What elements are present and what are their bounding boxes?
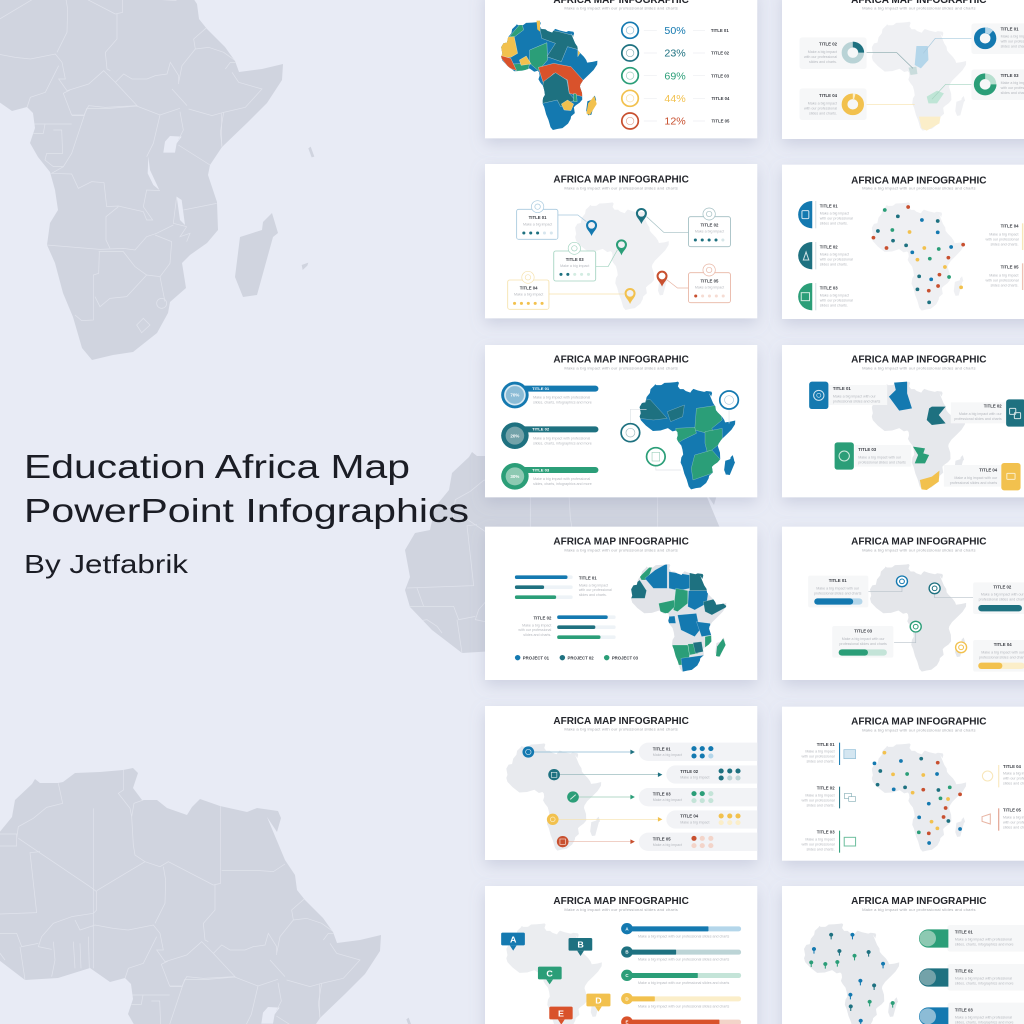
row 69% bbox=[622, 68, 730, 84]
main title: PowerPoint Infographics bbox=[24, 492, 469, 529]
callout C bbox=[538, 967, 562, 984]
connector lines bbox=[549, 215, 688, 294]
row 04 bbox=[547, 810, 757, 829]
map pins bbox=[586, 208, 668, 304]
progress row C: C bbox=[625, 973, 629, 978]
slide title: AFRICA MAP INFOGRAPHIC bbox=[851, 896, 987, 907]
row: title 02 20%: slides, charts, infographics and more bbox=[533, 441, 592, 445]
rating box 01: Make a big impact bbox=[523, 222, 552, 226]
main title bbox=[24, 448, 469, 529]
slide title: AFRICA MAP INFOGRAPHIC bbox=[553, 355, 689, 366]
block: title 05 bbox=[982, 808, 1024, 831]
panel: title 03 progress: Make a big impact with our bbox=[842, 637, 885, 641]
callout E bbox=[549, 1007, 573, 1024]
icon: teal ring bbox=[621, 409, 647, 442]
row: title 02 20% bbox=[501, 422, 598, 449]
block: title 03: TITLE 03 bbox=[817, 830, 835, 835]
row: title 03 30%: TITLE 03 bbox=[532, 467, 550, 472]
block: title 02: slides and charts. bbox=[807, 803, 835, 807]
progress row E bbox=[621, 1016, 741, 1024]
map dots bbox=[873, 751, 962, 845]
bars: title 01: Make a big impact bbox=[579, 583, 608, 587]
block: title 03: Make a big impact bbox=[805, 837, 835, 841]
row 12%: TITLE 05 bbox=[712, 119, 730, 124]
bars: title 01: with our professional bbox=[579, 588, 612, 592]
card: title 03: professional slides and charts bbox=[858, 460, 906, 464]
background map: northern Africa, bottom left bbox=[0, 768, 412, 1024]
bars: title 02: TITLE 02 bbox=[533, 615, 552, 620]
background map: West Africa behind the slides bbox=[405, 452, 719, 653]
connector lines bbox=[868, 587, 973, 643]
slide: pins with rating boxes bbox=[485, 164, 757, 318]
callout D bbox=[586, 994, 610, 1012]
title 02 with half-circle icon: slides and charts. bbox=[820, 262, 848, 266]
row 05 bbox=[557, 833, 757, 851]
panel: title 02 donut: with our professional bbox=[804, 55, 837, 59]
row 02 bbox=[548, 765, 757, 784]
panel: title 03 progress: TITLE 03 bbox=[854, 629, 873, 634]
panel: title 04 donut: with our professional bbox=[804, 106, 837, 110]
panel: title 04 progress bbox=[973, 640, 1024, 672]
slide: small pins and cards bbox=[782, 886, 1024, 1024]
row 69%: TITLE 03 bbox=[711, 73, 730, 78]
title 02 with half-circle icon: with our professional bbox=[820, 257, 853, 261]
slide subtitle: Make a big impact with our professional slides and charts bbox=[862, 186, 976, 191]
callout E: E bbox=[558, 1008, 564, 1018]
byline: By Jetfabrik bbox=[24, 549, 189, 579]
bars: title 02: with our professional bbox=[518, 628, 552, 632]
row: title 03 30%: 30% bbox=[510, 474, 519, 479]
title 03 with half-circle icon: Make a big impact bbox=[820, 293, 849, 297]
row 03 bbox=[567, 788, 757, 806]
progress row D: Make a big impact with our professional slides and charts bbox=[638, 1004, 730, 1008]
row: title 03 30% bbox=[501, 463, 598, 490]
card: title 03: TITLE 03 bbox=[858, 447, 877, 452]
row 50%: TITLE 01 bbox=[711, 28, 729, 33]
block: title 03 bbox=[802, 830, 856, 853]
card: title 01: TITLE 01 bbox=[833, 386, 851, 391]
rating box 05: Make a big impact bbox=[695, 286, 724, 290]
title 01 with half-circle icon: TITLE 01 bbox=[820, 203, 838, 208]
panel: title 04 donut bbox=[800, 88, 867, 120]
panel: title 02 donut: TITLE 02 bbox=[819, 42, 838, 47]
slide subtitle: Make a big impact with our professional slides and charts bbox=[564, 907, 678, 912]
percentage rows bbox=[622, 22, 730, 129]
card row 03: TITLE 03 bbox=[955, 1007, 973, 1012]
callout C: C bbox=[546, 968, 554, 978]
main title: Education Africa Map bbox=[24, 448, 410, 485]
progress row A: A bbox=[625, 926, 629, 931]
panel: title 04 progress: TITLE 04 bbox=[994, 642, 1012, 647]
callout A bbox=[501, 933, 525, 951]
row: title 03 30%: slides, charts, infographics and more bbox=[533, 482, 592, 486]
card: title 02: professional slides and charts bbox=[954, 417, 1002, 421]
slide subtitle: Make a big impact with our professional slides and charts bbox=[862, 6, 976, 11]
background map: southern Africa, top left bbox=[0, 0, 314, 360]
slide title: AFRICA MAP INFOGRAPHIC bbox=[851, 717, 987, 728]
slide: highlighted countries with icon cards bbox=[782, 345, 1024, 497]
rating box 04: TITLE 04 bbox=[520, 286, 538, 291]
title 05 right block bbox=[985, 263, 1023, 290]
rating box 05: TITLE 05 bbox=[701, 279, 719, 284]
row: title 01 70%: TITLE 01 bbox=[532, 386, 550, 391]
row 03: Make a big impact bbox=[653, 798, 682, 802]
panel: title 04 donut: TITLE 04 bbox=[819, 93, 838, 98]
card: title 02 bbox=[927, 399, 1024, 427]
rating box 03: TITLE 03 bbox=[566, 257, 584, 262]
legend: PROJECT 01 bbox=[523, 655, 550, 660]
slide: progress panels bbox=[782, 527, 1024, 680]
bars: title 01: slides and charts. bbox=[579, 593, 607, 597]
progress row B: B bbox=[625, 950, 629, 955]
row: title 02 20%: Make a big impact with professional bbox=[533, 436, 590, 440]
panel: title 02 progress bbox=[973, 582, 1024, 614]
panel: title 03 donut bbox=[971, 69, 1024, 100]
title 01 with half-circle icon: slides and charts. bbox=[820, 222, 848, 226]
connector lines bbox=[867, 53, 913, 68]
slide: project bars and map bbox=[485, 527, 757, 680]
slide: percent circles and blue green map bbox=[485, 345, 757, 497]
row 04: Make a big impact bbox=[680, 820, 709, 824]
card: title 01: Make a big impact with our bbox=[833, 394, 877, 398]
progress row D bbox=[621, 993, 741, 1008]
slide subtitle: Make a big impact with our professional slides and charts bbox=[564, 366, 678, 371]
grey map bbox=[575, 202, 669, 310]
legend bbox=[515, 655, 639, 660]
row: title 02 20%: 20% bbox=[510, 433, 519, 438]
title 05 right block: with our professional bbox=[985, 278, 1019, 282]
row 12% bbox=[622, 113, 730, 129]
title 05 right block: TITLE 05 bbox=[1001, 265, 1019, 270]
slide: dots with side icons bbox=[782, 707, 1024, 861]
title 03 with half-circle icon: TITLE 03 bbox=[820, 285, 838, 290]
panel: title 04 progress: Make a big impact with our bbox=[981, 651, 1024, 655]
card: title 02: TITLE 02 bbox=[984, 403, 1002, 408]
panel: title 03 progress bbox=[832, 626, 893, 658]
row 44% bbox=[622, 90, 730, 106]
map markers bbox=[896, 576, 967, 653]
block: title 02: with our professional bbox=[802, 798, 835, 802]
rating box 01: TITLE 01 bbox=[529, 215, 547, 220]
slide title: AFRICA MAP INFOGRAPHIC bbox=[851, 175, 987, 186]
rating box 02 bbox=[688, 208, 730, 247]
row: title 01 70%: slides, charts, infographics and more bbox=[533, 401, 592, 405]
card: title 03 bbox=[835, 442, 929, 470]
slides, rows 1 and 2 bbox=[485, 0, 1024, 319]
callout A: A bbox=[510, 934, 517, 944]
slide subtitle: Make a big impact with our professional slides and charts bbox=[862, 727, 976, 732]
panel: title 01 progress: TITLE 01 bbox=[829, 578, 847, 583]
row: title 01 70%: 70% bbox=[510, 393, 519, 398]
block: title 04: TITLE 04 bbox=[1003, 764, 1022, 769]
row 05: TITLE 05 bbox=[653, 836, 671, 841]
slide subtitle: Make a big impact with our professional slides and charts bbox=[862, 548, 976, 553]
panel: title 01 progress bbox=[808, 576, 868, 607]
progress row B bbox=[621, 946, 741, 962]
title 05 right block: slides and charts. bbox=[990, 283, 1019, 287]
panel: title 03 progress: professional slides and charts bbox=[839, 642, 887, 646]
panel: title 02 progress: TITLE 02 bbox=[993, 584, 1012, 589]
block: title 01: with our professional bbox=[802, 755, 835, 759]
block: title 05: TITLE 05 bbox=[1003, 808, 1022, 813]
block: title 01 bbox=[802, 742, 856, 765]
row 50% bbox=[622, 22, 729, 38]
slide: lettered callouts and progress bars bbox=[485, 886, 757, 1024]
progress row C bbox=[621, 970, 741, 985]
card: title 04: Make a big impact with our bbox=[954, 476, 998, 480]
card row 02: TITLE 02 bbox=[955, 968, 973, 973]
row 02: TITLE 02 bbox=[680, 769, 699, 774]
card: title 03: Make a big impact with our bbox=[858, 455, 902, 459]
progress row A bbox=[621, 923, 741, 938]
bars: title 02: slides and charts. bbox=[523, 633, 551, 637]
slide title: AFRICA MAP INFOGRAPHIC bbox=[553, 537, 689, 548]
slides, rows 5 and 6 bbox=[485, 706, 1024, 1024]
legend: PROJECT 02 bbox=[567, 655, 594, 660]
card row 03: Make a big impact with professional bbox=[955, 1016, 1012, 1020]
title 02 with half-circle icon: Make a big impact bbox=[820, 252, 849, 256]
rating box 02: TITLE 02 bbox=[701, 222, 719, 227]
card: title 01: professional slides and charts bbox=[833, 399, 881, 403]
grey map bbox=[506, 924, 602, 1024]
icon: blue ring bbox=[720, 391, 738, 423]
panel: title 02 donut: slides and charts. bbox=[809, 60, 837, 64]
slide title: AFRICA MAP INFOGRAPHIC bbox=[553, 175, 689, 186]
row 69%: 69% bbox=[664, 71, 686, 82]
row 03: TITLE 03 bbox=[653, 791, 671, 796]
slide: arrows and dot ratings bbox=[485, 706, 757, 860]
grey map bbox=[870, 564, 966, 672]
icon: green ring bbox=[647, 448, 681, 470]
block: title 03: slides and charts. bbox=[807, 847, 835, 851]
panel: title 04 donut: Make a big impact bbox=[808, 101, 837, 105]
slide subtitle: Make a big impact with our professional slides and charts bbox=[862, 907, 976, 912]
title 04 right block: with our professional bbox=[985, 237, 1019, 241]
row 02: Make a big impact bbox=[680, 776, 709, 780]
grey map bbox=[804, 924, 900, 1024]
card: title 02: Make a big impact with our bbox=[959, 412, 1002, 416]
panel: title 02 donut bbox=[800, 37, 867, 69]
small map pins bbox=[809, 933, 895, 1024]
blue and green map bbox=[638, 382, 735, 489]
row 12%: 12% bbox=[664, 117, 686, 128]
grey map bbox=[872, 744, 966, 852]
row 04: TITLE 04 bbox=[680, 814, 699, 819]
row 01: TITLE 01 bbox=[653, 746, 671, 751]
block: title 02: Make a big impact bbox=[805, 793, 835, 797]
row: title 01 70% bbox=[501, 382, 598, 408]
title 03 with half-circle icon: slides and charts. bbox=[820, 303, 848, 307]
slide title: AFRICA MAP INFOGRAPHIC bbox=[553, 716, 689, 727]
title 01 with half-circle icon bbox=[798, 201, 853, 228]
rating box 04: Make a big impact bbox=[514, 293, 543, 297]
row 50%: 50% bbox=[664, 26, 686, 37]
row: title 03 30%: Make a big impact with professional bbox=[533, 477, 590, 481]
row 23% bbox=[622, 45, 730, 61]
row 01 bbox=[522, 743, 757, 761]
row 23%: 23% bbox=[664, 49, 686, 60]
rating box 05 bbox=[688, 264, 730, 303]
title 01 with half-circle icon: with our professional bbox=[820, 217, 853, 221]
slide title: AFRICA MAP INFOGRAPHIC bbox=[851, 537, 987, 548]
bars: title 01 bbox=[515, 575, 612, 599]
card row 02: slides, charts, infographics and more bbox=[955, 982, 1014, 986]
block: title 01: TITLE 01 bbox=[817, 742, 835, 747]
rating box 03 bbox=[554, 242, 596, 281]
coloured Africa map bbox=[499, 21, 597, 130]
title 04 right block bbox=[985, 223, 1023, 250]
slide: dots on map with side titles bbox=[782, 165, 1024, 319]
title 03 with half-circle icon bbox=[798, 283, 853, 310]
card: title 04: TITLE 04 bbox=[979, 468, 998, 473]
row 23%: TITLE 02 bbox=[711, 51, 730, 56]
block: title 01: Make a big impact bbox=[805, 750, 835, 754]
slide subtitle: Make a big impact with our professional slides and charts bbox=[564, 727, 678, 732]
slide: donut charts bbox=[782, 0, 1024, 139]
title 04 right block: slides and charts. bbox=[990, 242, 1019, 246]
block: title 01: slides and charts. bbox=[807, 760, 835, 764]
title 01 with half-circle icon: Make a big impact bbox=[820, 211, 849, 215]
slide subtitle: Make a big impact with our professional slides and charts bbox=[862, 366, 976, 371]
title 02 with half-circle icon: TITLE 02 bbox=[820, 244, 838, 249]
slide subtitle: Make a big impact with our professional slides and charts bbox=[564, 185, 678, 190]
block: title 02: TITLE 02 bbox=[817, 786, 835, 791]
partly coloured map bbox=[629, 563, 727, 672]
card row 02 bbox=[919, 964, 1024, 991]
slide subtitle: Make a big impact with our professional slides and charts bbox=[564, 548, 678, 553]
rating box 04 bbox=[508, 271, 549, 309]
grey map bbox=[506, 744, 601, 850]
panel: title 02 progress: Make a big impact with our bbox=[981, 593, 1024, 597]
progress row A: Make a big impact with our professional slides and charts bbox=[638, 934, 730, 938]
rating box 02: Make a big impact bbox=[695, 229, 724, 233]
row 05: Make a big impact bbox=[653, 843, 682, 847]
bars: title 02: Make a big impact bbox=[522, 623, 551, 627]
bars: title 01: TITLE 01 bbox=[579, 575, 597, 580]
slide subtitle: Make a big impact with our professional slides and charts bbox=[564, 6, 678, 11]
slide: coloured map with percentages bbox=[485, 0, 757, 138]
card row 01: TITLE 01 bbox=[955, 929, 973, 934]
panel: title 01 donut bbox=[971, 23, 1024, 54]
map dots bbox=[872, 205, 965, 304]
row 44%: 44% bbox=[664, 94, 686, 105]
title 04 right block: Make a big impact bbox=[989, 232, 1018, 236]
title 05 right block: Make a big impact bbox=[989, 273, 1018, 277]
panel: title 03 donut: TITLE 03 bbox=[1001, 73, 1019, 78]
card: title 04: professional slides and charts bbox=[950, 481, 997, 485]
title 04 right block: TITLE 04 bbox=[1001, 224, 1019, 229]
slides, rows 3 and 4 bbox=[485, 345, 1024, 680]
row 01: Make a big impact bbox=[653, 753, 682, 757]
rating box 01 bbox=[517, 201, 558, 239]
title 03 with half-circle icon: with our professional bbox=[820, 298, 853, 302]
progress row B: Make a big impact with our professional slides and charts bbox=[638, 958, 730, 962]
card row 01: Make a big impact with professional bbox=[955, 938, 1012, 942]
block: title 04 bbox=[982, 764, 1024, 787]
slide title: AFRICA MAP INFOGRAPHIC bbox=[851, 355, 987, 366]
panel: title 04 donut: slides and charts. bbox=[809, 111, 837, 115]
row 44%: TITLE 04 bbox=[712, 96, 730, 101]
callout B bbox=[569, 938, 592, 956]
block: title 03: with our professional bbox=[802, 842, 835, 846]
row: title 02 20%: TITLE 02 bbox=[532, 427, 550, 432]
grey map bbox=[872, 202, 964, 310]
slide title: AFRICA MAP INFOGRAPHIC bbox=[553, 896, 689, 907]
card row 01 bbox=[919, 925, 1024, 952]
card row 01: slides, charts, infographics and more bbox=[955, 943, 1014, 947]
title 02 with half-circle icon bbox=[798, 242, 853, 269]
progress row D: D bbox=[625, 996, 629, 1001]
row: title 01 70%: Make a big impact with professional bbox=[533, 396, 590, 400]
panel: title 01 donut: TITLE 01 bbox=[1001, 27, 1019, 32]
panel: title 02 donut: Make a big impact bbox=[808, 50, 837, 54]
card: title 04 bbox=[920, 463, 1021, 490]
card: title 01 bbox=[809, 382, 912, 411]
card row 03 bbox=[919, 1003, 1024, 1024]
callout B: B bbox=[577, 940, 584, 950]
bars: title 02 bbox=[518, 615, 616, 639]
progress row C: Make a big impact with our professional slides and charts bbox=[638, 981, 730, 985]
grey map bbox=[872, 382, 965, 488]
legend: PROJECT 03 bbox=[612, 655, 639, 660]
card row 02: Make a big impact with professional bbox=[955, 977, 1012, 981]
callout D: D bbox=[595, 995, 602, 1005]
block: title 02 bbox=[802, 786, 856, 808]
rating box 03: Make a big impact bbox=[560, 264, 589, 268]
grey map with highlighted countries bbox=[872, 22, 966, 131]
panel: title 01 progress: professional slides and charts bbox=[814, 591, 862, 595]
panel: title 01 progress: Make a big impact with our bbox=[816, 586, 860, 590]
